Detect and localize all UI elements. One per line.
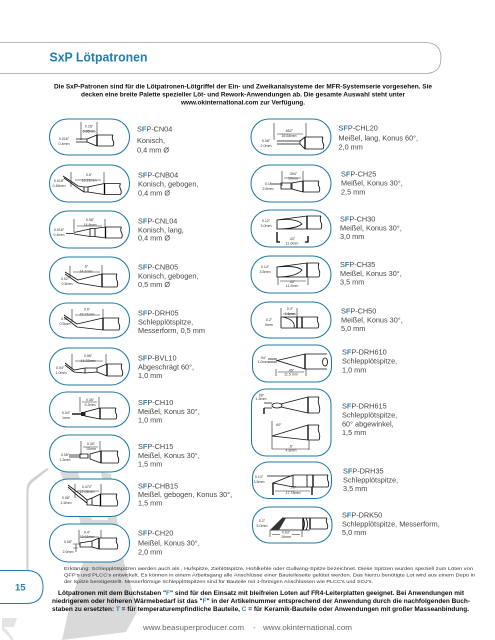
panel: SFP-CHL20 diagram: 16.64mm [282,134,296,138]
panel: SFP-DRH35 diagram: 0.14" [255,475,264,479]
panel: SFP-DRH05 diagram: 0.6" [84,308,91,312]
panel: SFP-CH30 diagram: 3.0mm [261,224,271,228]
label: SFP-CH20: Meißel, Konus 30°, [138,538,200,548]
label: SFP-CHB15: Meißel, gebogen, Konus 30°, [138,490,232,499]
label: SFP-CH10: 1,0 mm [138,416,162,424]
panel: SFP-DRK50 diagram: 16mm [281,535,291,539]
label: SFP-CH15: Meißel, Konus 30°, [138,451,200,460]
title: SxP Lötpatronen [50,50,148,64]
panel: SFP-CH35 diagram: 0.14" [261,265,270,269]
panel: SFP-CNB05 diagram [50,257,130,294]
explanation text: Erklärung: Schlepplötspitzen werden auch als , Hufspitze, Ziehlötspitze, Hohlkehle oder Gullwing-Spitze bezeichnet. Diese Spitzen wurden speziell zum Löten von [64,566,473,572]
panel: SFP-CH25 diagram [251,165,331,202]
panel: SFP-CH10 diagram: 0.36" [86,398,95,402]
panel: SFP-DRH35 diagram: 3.5mm [254,480,264,484]
panel: SFP-CH35 diagram: 3.5mm [260,270,270,274]
panel: SFP-CH25 diagram: .394" [289,172,298,176]
label: SFP-DRH610: Schlepplötspitze, [342,356,397,366]
footer links [142,623,352,632]
panel: SFP-CHB15 diagram [50,479,130,516]
footer links: - [253,623,256,632]
label: SFP-CH15: 1,5 mm [138,460,162,468]
panel: SFP-CH35 diagram: 11.2mm [286,284,298,288]
label: SFP-CH30: 3,0 mm [340,232,364,241]
panel: SFP-CHB15 diagram: 12.04mm [80,490,94,494]
label: SFP-CNB04: Konisch, gebogen, [138,180,198,188]
label: SFP-CH50: Meißel, Konus 30°, [341,316,403,324]
explanation text: QFP's und PLCC's entwickelt. Es können in einem Arbeitsgang alle Anschlüsse einer Bauteileseite gelötet werden. Das hierzu benötigte Lot wird aus einem Depo in [64,572,475,578]
panel: SFP-CNB04 diagram: 0.018" [54,179,65,183]
panel: SFP-CH20 diagram: 2.0mm [63,550,73,554]
panel: SFP-DRH615 diagram: .06" [258,394,265,398]
panel: SFP-BVL10 diagram: 0.04" [56,366,65,370]
label: SFP-CN04: SFP-CN04 [137,124,172,134]
panel: SFP-CHL20 diagram: 0.08" [262,139,271,143]
panel: SFP-DRH610 diagram: 11.5 mm [284,372,298,376]
panel: SFP-CN04 diagram: 6.86mm [83,130,95,134]
panel: SFP-CH50 diagram: 7.6mm [285,312,295,316]
label: SFP-CH25: SFP-CH25 [341,170,376,178]
panel: SFP-CNB04 diagram: 15.21mm [82,178,96,182]
panel: SFP-CHB15 diagram: 0.08" [62,496,71,500]
panel: SFP-CH30 diagram: 0.12" [262,219,271,223]
label: SFP-BVL10: Abgeschrägt 60°, [138,362,194,372]
panel: SFP-CNL04 diagram: 0.58" [86,218,95,222]
panel: SFP-CNL04 diagram: 0.4mm [54,233,64,237]
label: SFP-CNL04: SFP-CNL04 [138,216,177,226]
label: SFP-CHL20: SFP-CHL20 [338,124,378,132]
intro text [54,84,433,106]
panel: SFP-CNB05 diagram: 0.02" [61,277,70,281]
panel: SFP-DRH615 diagram: 60° [276,423,282,427]
panel: SFP-CHB15 diagram: 1.5mm [61,501,71,505]
panel: SFP-CHB15 diagram: 0.472" [82,485,93,489]
panel: SFP-CH20 diagram [50,524,130,562]
panel: SFP-DRH615 diagram: .6" [289,444,294,448]
panel: SFP-CH15 diagram: 0.06" [61,453,70,457]
panel: SFP-BVL10 diagram: 0.56" [84,354,93,358]
panel: SFP-CH25 diagram: 10mm [288,176,298,180]
panel: SFP-DRH35 diagram [252,462,332,498]
label: SFP-DRH35: 3,5 mm [343,484,367,493]
label: SFP-BVL10: 1,0 mm [138,371,162,380]
page number: 15 [15,582,26,594]
label: SFP-DRH35: Schlepplötspitze, [343,476,398,484]
label: SFP-CH10: Meißel, Konus 30°, [138,407,200,416]
note on letter F: niedrigerem oder höheren Wärmebedarf ist das " F" in der Artikelnummer entsprechend der Anwendung durch die nachfolgenden Buch- [52,598,470,605]
panel: SFP-CNL04 diagram [50,211,130,248]
panel: SFP-DRH35 diagram: .70" [290,486,297,490]
panel: SFP-DRH610 diagram: .04" [260,356,267,360]
header banner [0,42,441,74]
panel: SFP-CNB05 diagram: 0.5mm [62,282,72,286]
label: SFP-CNB05: Konisch, gebogen, [138,272,198,280]
label: SFP-CH35: Meißel, Konus 30°, [340,269,402,278]
label: SFP-DRH05: Messerform, 0,5 mm [138,326,205,335]
label: SFP-CNB05: SFP-CNB05 [138,262,178,272]
label: SFP-DRH610: SFP-DRH610 [342,348,387,356]
panel: SFP-CH25 diagram: 0.1" [265,182,272,186]
panel: SFP-CN04 diagram: 0.4mm [59,142,69,146]
panel: SFP-CH35 diagram [251,256,331,293]
panel: SFP-CH50 diagram [251,302,331,338]
panel: SFP-DRK50 diagram [252,507,332,543]
label: SFP-CH20: 2,0 mm [138,548,162,556]
panel: SFP-CH30 diagram: 11.0mm [286,242,298,246]
panel: SFP-DRH610 diagram: .45" [288,368,295,372]
label: SFP-DRH615: SFP-DRH615 [342,402,387,410]
label: SFP-BVL10: SFP-BVL10 [138,354,177,362]
panel: SFP-CNB04 diagram: 0.6" [86,173,93,177]
label: SFP-DRK50: SFP-DRK50 [342,510,382,520]
label: SFP-CHB15: SFP-CHB15 [138,482,178,490]
panel: SFP-DRK50 diagram: 0.63" [282,530,291,534]
panel: SFP-CH15 diagram: 10mm [86,447,96,451]
label: SFP-DRH615: 60° abgewinkel, [342,420,394,428]
panel: SFP-CH50 diagram: 0.2" [266,318,273,322]
panel: SFP-DRH35 diagram: 17.78mm [286,491,300,495]
label: SFP-CNB05: 0,5 mm Ø [138,280,170,289]
label: SFP-CH50: 5,0 mm [341,324,365,333]
panel: SFP-CNB05 diagram: 14.1mm [80,270,92,274]
panel: SFP-DRH05 diagram [50,303,130,338]
label: SFP-CHL20: Meißel, lang, Konus 60°, [338,134,418,142]
panel: SFP-DRH615 diagram: 1.5mm [256,397,266,401]
label: SFP-CNB04: 0,4 mm Ø [138,188,170,198]
panel: SFP-CN04 diagram [50,119,130,155]
label: SFP-DRH05: SFP-DRH05 [138,308,179,318]
label: SFP-CH50: SFP-CH50 [341,306,376,316]
note on letter F: Lötpatronen mit dem Buchstaben " F" sind für den Einsatz mit bleifreien Loten auf FR4-Leiterplatten geeignet. Bei Anwendungen mit [58,590,464,597]
label: SFP-CNL04: 0,4 mm Ø [138,234,170,242]
footer links: www.beasuperproducer.com [142,623,244,632]
label: SFP-DRH610: 1,0 mm [342,366,366,374]
panel: SFP-DRH05 diagram: 0.02" [61,317,70,321]
panel: SFP-CH15 diagram: 0.36" [87,442,96,446]
panel: SFP-DRH05 diagram: 0.5mm [60,322,70,326]
panel: SFP-CH10 diagram: 0.04" [62,411,71,415]
intro text: Die SxP-Patronen sind für die Lötpatronen-Lötgriffel der Ein- und Zweikanalsysteme der MFR-Systemserie vorgesehen. Sie [54,84,433,90]
panel: SFP-CH10 diagram: 9.2mm [85,403,95,407]
label: SFP-CH30: Meißel, Konus 30°, [340,224,402,232]
label: SFP-DRH35: SFP-DRH35 [343,466,384,476]
panel: SFP-CNL04 diagram: 14.8mm [84,223,96,227]
panel: SFP-CN04 diagram: 0.016" [59,137,70,141]
label: SFP-CH35: 3,5 mm [340,278,364,286]
panel: SFP-CHL20 diagram: .652" [285,129,294,133]
panel: SFP-CNL04 diagram: 0.016" [54,228,65,232]
label: SFP-DRK50: Schlepplötspitze, Messerform, [342,520,440,528]
label: SFP-DRH05: Schlepplötspitze, [138,318,193,326]
panel: SFP-CH30 diagram: .43" [289,237,296,241]
panel: SFP-CH20 diagram: 12.91mm [80,535,94,539]
panel: SFP-CH15 diagram [50,435,130,472]
panel: SFP-BVL10 diagram: 14.22mm [81,359,95,363]
page number tab [0,570,43,604]
panel: SFP-CH35 diagram: .43" [289,280,296,284]
panel: SFP-CH20 diagram: 0.4" [84,530,91,534]
label: SFP-CH35: SFP-CH35 [340,260,375,269]
footer links: www.okinternational.com [262,623,352,632]
intro text: www.okinternational.com zur Verfügung. [180,100,305,106]
panel: SFP-DRH615 diagram: 4.8mm [286,448,296,452]
panel: SFP-CH10 diagram [50,392,130,427]
panel: SFP-CH15 diagram: 1.5mm [60,458,70,462]
panel: SFP-CNB04 diagram: 0.46mm [53,184,65,188]
label: SFP-CN04: Konisch, [137,136,165,145]
panel: SFP-DRH610 diagram: 1.0mm [258,360,268,364]
label: SFP-CHB15: 1,5 mm [138,498,162,508]
label: SFP-CNB04: SFP-CNB04 [138,170,178,180]
label: SFP-DRH615: 1,5 mm [342,428,366,437]
label: SFP-CHL20: 2,0 mm [338,142,363,152]
panel: SFP-BVL10 diagram: 1.0mm [56,371,66,375]
panel: SFP-CH30 diagram [251,210,331,247]
panel: SFP-CNB04 diagram [50,165,130,202]
panel: SFP-CN04 diagram: 0.26" [85,124,94,128]
panel: SFP-CH50 diagram: 0.3" [287,307,294,311]
panel: SFP-DRK50 diagram: 5.0mm [257,524,267,528]
panel: SFP-CH10 diagram: 1mm [62,416,70,420]
label: SFP-CH20: SFP-CH20 [138,528,173,538]
label: SFP-DRK50: 5,0 mm [342,528,366,537]
panel: SFP-CH20 diagram: 0.08" [64,540,73,544]
panel: SFP-CHL20 diagram: 2.0mm [261,144,271,148]
label: SFP-CH15: SFP-CH15 [138,442,173,451]
panel: SFP-CH50 diagram: 5mm [265,323,273,327]
note on letter F: staben zu ersetzten: T = für temperaturempfindliche Bauteile, C = für Keramik-Bauteile oder Anwendungen mit großer Masseanbindung. [52,606,469,613]
panel: SFP-BVL10 diagram [50,348,130,385]
intro text: decken eine breite Palette spezieller Löt- und Rework-Anwendungen ab. Die gesamte Auswahl steht unter [81,92,406,98]
label: SFP-CH30: SFP-CH30 [340,214,375,224]
background silhouette [2,468,138,640]
panel: SFP-CH25 diagram: 2.5mm [263,187,273,191]
panel: SFP-DRH615 diagram [252,389,331,456]
label: SFP-CH25: Meißel, Konus 30°, [341,178,403,188]
label: SFP-DRH615: Schlepplötspitze, [342,410,397,420]
label: SFP-CN04: 0,4 mm Ø [137,146,169,154]
note on letter F [52,590,470,613]
panel: SFP-CNB05 diagram: .6" [84,264,89,268]
label: SFP-CH10: SFP-CH10 [138,398,173,407]
label: SFP-CH25: 2,5 mm [341,188,365,196]
panel: SFP-DRH610 diagram [252,345,332,382]
panel: SFP-CHL20 diagram [251,119,331,155]
panel: SFP-DRH05 diagram: 15.21mm [80,312,94,316]
explanation text [64,566,475,585]
panel: SFP-DRK50 diagram: 0.2" [259,519,266,523]
label: SFP-CNL04: Konisch, lang, [138,226,184,234]
explanation text: der Spitze bereitgestellt. Messerförmige Schlepplötspitzen sind für Bauteile mit J-förmigen Anschlüssen wie PLCC's und SOJ's. [64,579,373,585]
